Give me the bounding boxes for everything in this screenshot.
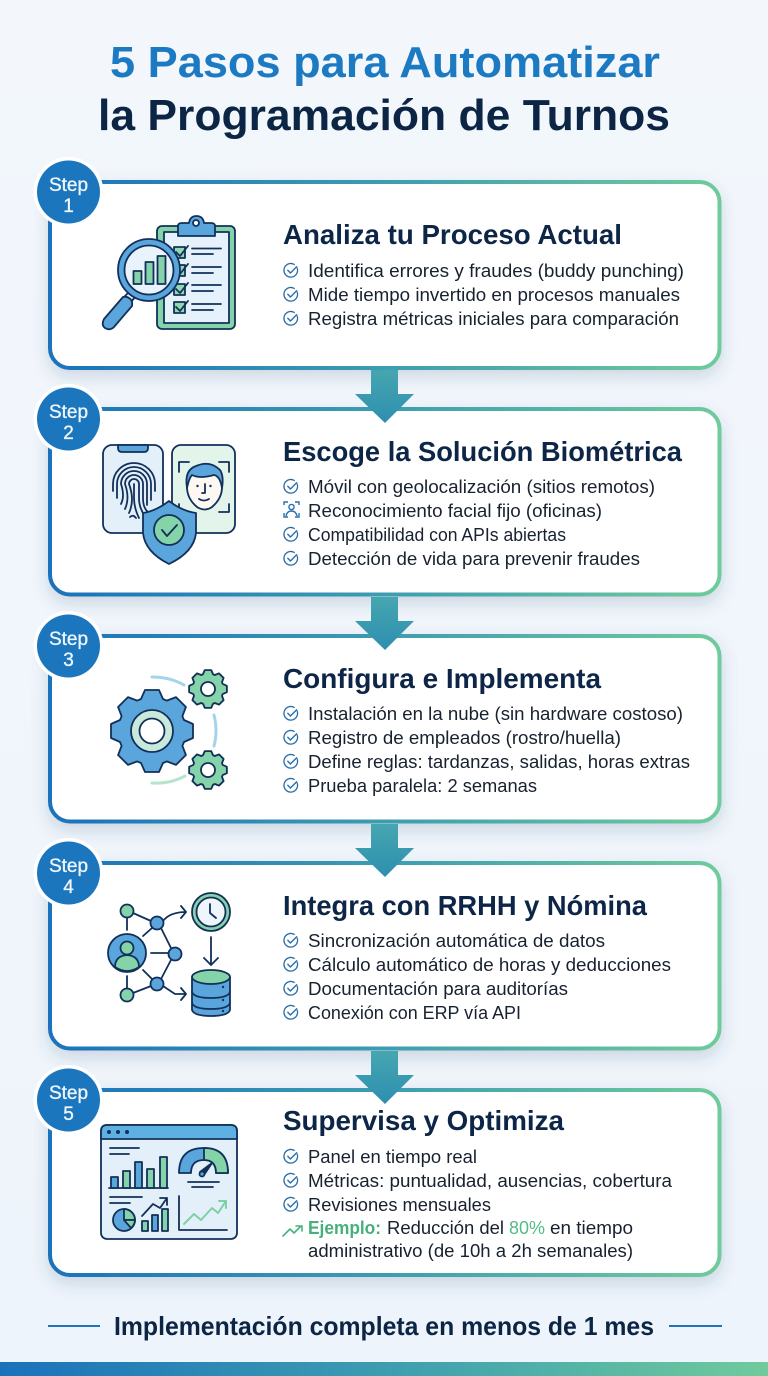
panel: step 3: [34, 611, 720, 822]
checklist: Conexión con ERP vía API: [308, 1003, 521, 1023]
checklist: Compatibilidad con APIs abiertas: [308, 525, 566, 545]
step badge: [34, 157, 104, 227]
checklist: Define reglas: tardanzas, salidas, horas extras: [308, 752, 690, 772]
step badge: 3: [63, 650, 74, 671]
checklist: Instalación en la nube (sin hardware costoso): [308, 704, 683, 724]
checklist: Registro de empleados (rostro/huella): [308, 728, 621, 748]
step badge: 4: [63, 877, 74, 898]
checklist: [284, 1147, 673, 1215]
icon: clipboard and magnifier: [103, 216, 235, 329]
icon: network, clock and database: [108, 893, 230, 1016]
callout: example: administrativo (de 10h a 2h semanales): [308, 1241, 633, 1261]
step badge: [34, 838, 104, 908]
checklist: Métricas: puntualidad, ausencias, cobertura: [308, 1171, 673, 1191]
heading: Escoge la Solución Biométrica: [283, 436, 682, 467]
arrow: step 3 to 4: [355, 824, 414, 877]
checklist: Sincronización automática de datos: [308, 931, 605, 951]
card frame: [50, 863, 720, 1048]
step badge: Step: [49, 402, 88, 423]
checklist: [284, 931, 671, 1023]
checklist: Cálculo automático de horas y deducciones: [308, 955, 671, 975]
callout: example: Reducción del: [387, 1218, 504, 1238]
checklist: Detección de vida para prevenir fraudes: [308, 549, 640, 569]
checklist: Revisiones mensuales: [308, 1195, 491, 1215]
title: la Programación de Turnos: [98, 91, 670, 140]
icon: face scan: [284, 502, 299, 517]
panel: step 4: [34, 838, 720, 1048]
card frame: [50, 182, 720, 368]
arrow: step 2 to 3: [355, 597, 414, 650]
checklist: Registra métricas iniciales para comparación: [308, 309, 679, 329]
title: [98, 38, 670, 140]
checklist: Reconocimiento facial fijo (oficinas): [308, 501, 602, 521]
icon: gears: [111, 670, 227, 789]
checklist: Documentación para auditorías: [308, 979, 568, 999]
icon: dashboard: [101, 1125, 237, 1239]
checklist: [284, 261, 684, 329]
step badge: [34, 384, 104, 454]
step badge: 1: [63, 196, 74, 217]
step badge: [34, 1065, 104, 1135]
step badge: Step: [49, 1083, 88, 1104]
title: 5 Pasos para Automatizar: [110, 38, 660, 87]
checklist: [284, 477, 655, 569]
card frame: [50, 1090, 720, 1275]
step badge: [34, 611, 104, 681]
callout: example: Ejemplo:: [308, 1218, 381, 1238]
checklist: [284, 704, 690, 796]
bottom gradient bar: [0, 1362, 768, 1376]
step badge: Step: [49, 856, 88, 877]
panel: step 1: [34, 157, 720, 368]
checklist: Mide tiempo invertido en procesos manuales: [308, 285, 680, 305]
checklist: Prueba paralela: 2 semanas: [308, 776, 537, 796]
icon: biometric fingerprint, face and shield: [103, 445, 235, 564]
panel: step 5: [34, 1065, 720, 1275]
heading: Integra con RRHH y Nómina: [283, 890, 647, 921]
step badge: 2: [63, 423, 74, 444]
card frame: [50, 636, 720, 822]
step badge: Step: [49, 629, 88, 650]
arrow: step 1 to 2: [355, 370, 414, 423]
checklist: Identifica errores y fraudes (buddy punching): [308, 261, 684, 281]
heading: Configura e Implementa: [283, 663, 601, 694]
arrow: step 4 to 5: [355, 1051, 414, 1104]
heading: Analiza tu Proceso Actual: [283, 219, 622, 250]
callout: example: en tiempo: [550, 1218, 633, 1238]
callout: example: [283, 1218, 633, 1261]
footer note: Implementación completa en menos de 1 mes: [114, 1311, 654, 1341]
callout: example: 80%: [509, 1218, 545, 1238]
heading: Supervisa y Optimiza: [283, 1105, 564, 1136]
step badge: Step: [49, 175, 88, 196]
card frame: [50, 409, 720, 594]
step badge: 5: [63, 1104, 74, 1125]
checklist: Panel en tiempo real: [308, 1147, 477, 1167]
panel: step 2: [34, 384, 720, 594]
checklist: Móvil con geolocalización (sitios remotos): [308, 477, 655, 497]
